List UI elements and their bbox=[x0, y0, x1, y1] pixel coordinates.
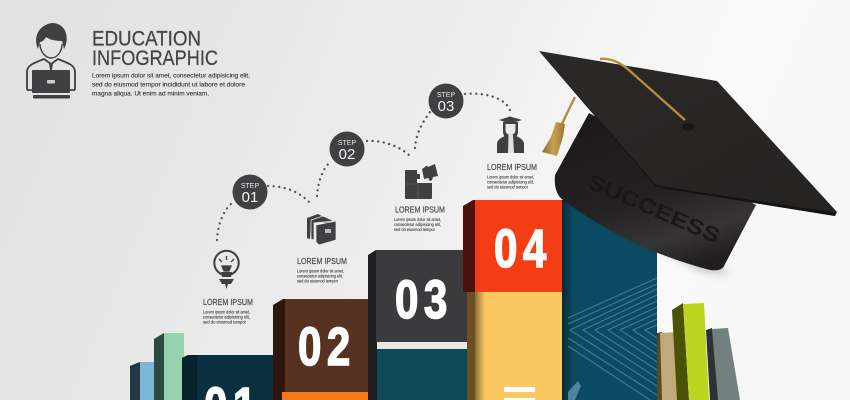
label: lorem ipsum 2: sed do eiusmod tempor bbox=[297, 278, 339, 284]
label: lorem ipsum 4: consectetur adipisicing elit, bbox=[487, 180, 534, 184]
cap base bbox=[555, 113, 756, 270]
step 02: 02 bbox=[339, 146, 355, 163]
title: INFOGRAPHIC bbox=[92, 47, 218, 70]
button bbox=[682, 123, 694, 131]
label: lorem ipsum 1 bbox=[203, 297, 253, 324]
cap text: SUCCEESS bbox=[584, 170, 723, 248]
teal book with line pattern bbox=[562, 200, 657, 400]
label: lorem ipsum 3: sed do eiusmod tempor bbox=[394, 227, 436, 232]
icon: books bbox=[307, 214, 336, 245]
left small books bbox=[130, 333, 184, 400]
tassel cord back bbox=[562, 97, 575, 124]
label: lorem ipsum 3: Lorem ipsum dolor sit amet, bbox=[394, 217, 441, 222]
title bbox=[92, 28, 218, 70]
step 03: 03 bbox=[438, 98, 454, 115]
step 01 bbox=[232, 174, 268, 210]
book 04: 04 bbox=[494, 219, 552, 279]
step 03 bbox=[428, 84, 464, 118]
right small books bbox=[657, 303, 740, 400]
label: lorem ipsum 2: LOREM IPSUM bbox=[297, 256, 347, 266]
tassel cord bbox=[600, 59, 685, 120]
step 01: 01 bbox=[242, 189, 258, 206]
intro text: sed do eiusmod tempor incididunt ut labore et dolore bbox=[92, 82, 246, 88]
label: lorem ipsum 1: Lorem ipsum dolor sit amet, bbox=[203, 310, 250, 314]
step 03: STEP bbox=[437, 92, 455, 99]
icon: puzzle bbox=[405, 164, 438, 199]
label: lorem ipsum 1: consectetur adipisicing elit, bbox=[203, 314, 250, 320]
label: lorem ipsum 4: LOREM IPSUM bbox=[487, 162, 537, 172]
book 01 bbox=[182, 355, 277, 400]
label: lorem ipsum 3 bbox=[394, 204, 445, 232]
icon: light bulb bbox=[214, 251, 239, 289]
icon: graduate bbox=[497, 116, 524, 153]
board bbox=[539, 51, 837, 216]
intro text: magna aliqua. Ut enim ad minim veniam, bbox=[92, 90, 209, 98]
step 02 bbox=[330, 132, 364, 166]
book 03 bbox=[368, 250, 467, 400]
label: lorem ipsum 2: Lorem ipsum dolor sit amet, bbox=[297, 268, 344, 274]
label: lorem ipsum 4: sed do eiusmod tempor bbox=[487, 184, 529, 190]
title: EDUCATION bbox=[92, 28, 201, 50]
label: lorem ipsum 3: LOREM IPSUM bbox=[395, 204, 445, 214]
book 03: 03 bbox=[395, 270, 453, 330]
label: lorem ipsum 4: Lorem ipsum dolor sit amet, bbox=[487, 174, 534, 180]
dotted path bbox=[217, 94, 510, 240]
book 04 bbox=[463, 200, 562, 400]
book 02: 02 bbox=[298, 317, 356, 377]
intro text bbox=[92, 72, 250, 98]
label: lorem ipsum 3: consectetur adipisicing elit, bbox=[394, 222, 441, 227]
label: lorem ipsum 2: consectetur adipisicing elit, bbox=[297, 274, 343, 278]
book 02 bbox=[273, 299, 371, 400]
label: lorem ipsum 2 bbox=[297, 256, 347, 284]
step 02: STEP bbox=[338, 140, 356, 147]
graduation cap bbox=[539, 51, 837, 275]
icon: person with laptop bbox=[27, 23, 75, 98]
label: lorem ipsum 4 bbox=[487, 162, 537, 190]
label: lorem ipsum 1: LOREM IPSUM bbox=[203, 297, 253, 307]
tassel bbox=[542, 122, 565, 156]
label: lorem ipsum 1: sed do eiusmod tempor bbox=[203, 320, 247, 324]
step 01: STEP bbox=[241, 183, 259, 190]
intro text: Lorem ipsum dolor sit amet, consectetur adipisicing elit, bbox=[92, 72, 250, 80]
